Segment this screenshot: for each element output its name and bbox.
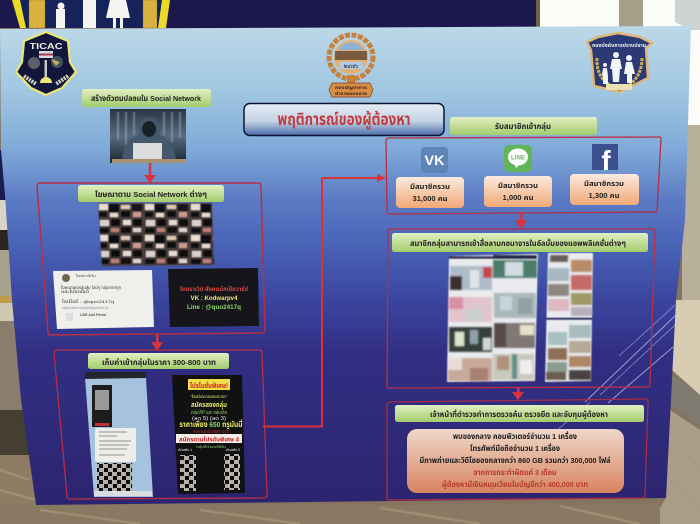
image: black price poster: ดับเพลิง 1 bbox=[178, 448, 192, 452]
heading: police action: เจ้าหน้าที่ตำรวจทำการตรวจค้น ตรวจยึด และจับกุมผู้ต้องหา bbox=[430, 409, 608, 420]
text block: seized evidence: ผู้ต้องหามีเงินหมุนเวียนในบัญชีกว่า 400,000 บาท bbox=[442, 480, 588, 490]
heading: accepting members: รับสมาชิกเข้ากลุ่ม bbox=[495, 122, 551, 132]
image: chat screenshot bbox=[85, 372, 153, 497]
panel: membership fee bbox=[54, 350, 267, 499]
image: black price poster: (ลด 5) (ลด 3) bbox=[192, 416, 226, 422]
chip: LINE members: 1,000 คน bbox=[502, 195, 534, 202]
arrow: albums to arrest bbox=[512, 388, 524, 400]
heading: fee 300-800 baht: เก็บค่าเข้ากลุ่มในราคา 300-800 บาท bbox=[102, 358, 216, 368]
card: contact details on black: โดดราเวิป สังคมนักเปิดวาร์ป bbox=[180, 285, 248, 293]
icon: VK: VK bbox=[424, 152, 444, 168]
icon: police child-protection badge bbox=[587, 33, 652, 92]
chip: VK members: มีสมาชิกรวม bbox=[410, 183, 451, 191]
heading: advertising bbox=[78, 185, 224, 202]
chip: LINE members: มีสมาชิกรวม bbox=[498, 182, 539, 190]
icon: VK bbox=[421, 147, 448, 173]
heading: accepting members bbox=[450, 117, 597, 135]
image: black price poster: "โลลลิตะกลองเทวดา" bbox=[190, 394, 229, 399]
panel: police search and arrest bbox=[387, 399, 648, 500]
icon: police child-protection badge: กองบังคับการปราบปราม bbox=[592, 42, 646, 49]
icon: royal emblem: กองบัญชาการ bbox=[335, 84, 368, 90]
top-left shield on backdrop bbox=[12, 0, 170, 28]
chip: VK members: 31,000 คน bbox=[412, 196, 448, 203]
arrow: members to albums bbox=[515, 212, 527, 229]
image: black price poster: สมัครตามโปรดับพิเศษ 4 bbox=[179, 436, 239, 444]
image: black price poster: ราคาเพียง 650 ทรูมันนี่ bbox=[180, 419, 243, 429]
card: LINE advert post: โลลการิทึม bbox=[76, 274, 96, 278]
card: contact details on black: Line : @quo2417q bbox=[187, 304, 241, 311]
title: พฤติการณ์ของผู้ต้องหา bbox=[278, 110, 410, 130]
icon: Facebook: f bbox=[601, 145, 611, 176]
chip: VK members bbox=[396, 177, 464, 208]
arrow: advertising to fee bbox=[151, 335, 163, 351]
panel: advertising on social networks bbox=[37, 183, 265, 335]
icon: royal emblem: ๒๔๗๖ bbox=[344, 64, 358, 70]
icon: royal emblem bbox=[329, 35, 373, 97]
card: contact details on black: VK : Kodwarpv4 bbox=[190, 295, 238, 302]
image: black price poster: ราคาปกติ 900 บาท bbox=[193, 429, 229, 434]
image: black price poster: กลุ่มVIP และ กลุ่มเด็ก bbox=[191, 409, 227, 416]
text block: seized evidence: จากการกระทำผิดแค่ 3 เดือน bbox=[474, 468, 557, 477]
card: LINE advert post: ไลน์ไอดี : @quo2417q bbox=[61, 299, 114, 304]
heading: advertising: โฆษณาตาม Social Network ต่างๆ bbox=[95, 190, 207, 199]
icon: TICAC badge bbox=[16, 32, 76, 95]
icon: LINE bbox=[504, 145, 532, 172]
panel: album access bbox=[387, 229, 655, 388]
card: contact details on black bbox=[168, 268, 259, 327]
icon: Facebook bbox=[592, 144, 618, 176]
icon: royal emblem: ตำรวจนครบาล bbox=[335, 90, 367, 96]
chip: Facebook members bbox=[570, 174, 639, 205]
text block: seized evidence: โทรศัพท์มือถือจำนวน 1 เครื่อง bbox=[470, 443, 560, 453]
chip: Facebook members: มีสมาชิกรวม bbox=[584, 180, 625, 188]
arrow: identity to advertising bbox=[144, 163, 156, 183]
chip: Facebook members: 1,300 คน bbox=[588, 193, 620, 200]
heading: album access: สมาชิกกลุ่มสามารถเข้าสื่อลามกอนาจารในอัลบั้มของแอพพลิเคชั่นต่างๆ bbox=[410, 238, 626, 249]
image: blurred ad mosaic bbox=[98, 203, 214, 266]
image: black price poster: ดับเพลิง 3 bbox=[226, 448, 240, 452]
icon: LINE: LINE bbox=[511, 154, 526, 162]
heading: create fake identity: สร้างตัวตนปลอมใน Social Network bbox=[91, 94, 202, 103]
panel: social group member counts bbox=[386, 137, 661, 214]
image: black price poster: สมัครสองกลุ่ม bbox=[191, 401, 227, 410]
card: LINE advert post: และโปรดใจดี bbox=[61, 289, 90, 294]
chip: LINE members bbox=[484, 176, 552, 207]
card: LINE advert post: https://line.me/ti/p/@quo2417q bbox=[62, 306, 108, 310]
card: LINE advert post: โฆษณาเพจกลุ่มลับ ไลน์ๆ กลุ่มราคาถูก bbox=[61, 285, 122, 290]
title bbox=[244, 104, 444, 136]
image: blurred album screenshots right bbox=[545, 253, 593, 382]
arrow: fee to member groups bbox=[263, 174, 386, 426]
image: black price poster: โปรโมชั่นพิเศษ! bbox=[190, 380, 228, 390]
image: hooded hacker at laptop bbox=[110, 109, 186, 163]
image: black price poster: กลุ่มที่ท่านจะได้รับ bbox=[196, 444, 226, 449]
heading: fee 300-800 baht bbox=[88, 353, 229, 369]
text block: seized evidence: มีภาพถ่ายและวิดีโอของกลางกว่า 860 GB รวมกว่า 300,000 ไฟล์ bbox=[419, 456, 610, 465]
image: black price poster bbox=[172, 375, 245, 494]
decorative diagonal lines bbox=[555, 305, 676, 432]
heading: police action bbox=[395, 405, 644, 422]
image: blurred album screenshots left bbox=[447, 254, 538, 382]
card: LINE advert post bbox=[53, 270, 154, 329]
card: LINE advert post: LINE Add Friend bbox=[80, 312, 106, 317]
icon: TICAC badge: TICAC bbox=[30, 42, 63, 51]
text block: seized evidence: พบของกลาง คอมพิวเตอร์จำนวน 1 เครื่อง bbox=[453, 431, 577, 441]
heading: create fake identity bbox=[82, 89, 211, 107]
text block: seized evidence bbox=[407, 429, 624, 493]
heading: album access bbox=[392, 233, 648, 252]
